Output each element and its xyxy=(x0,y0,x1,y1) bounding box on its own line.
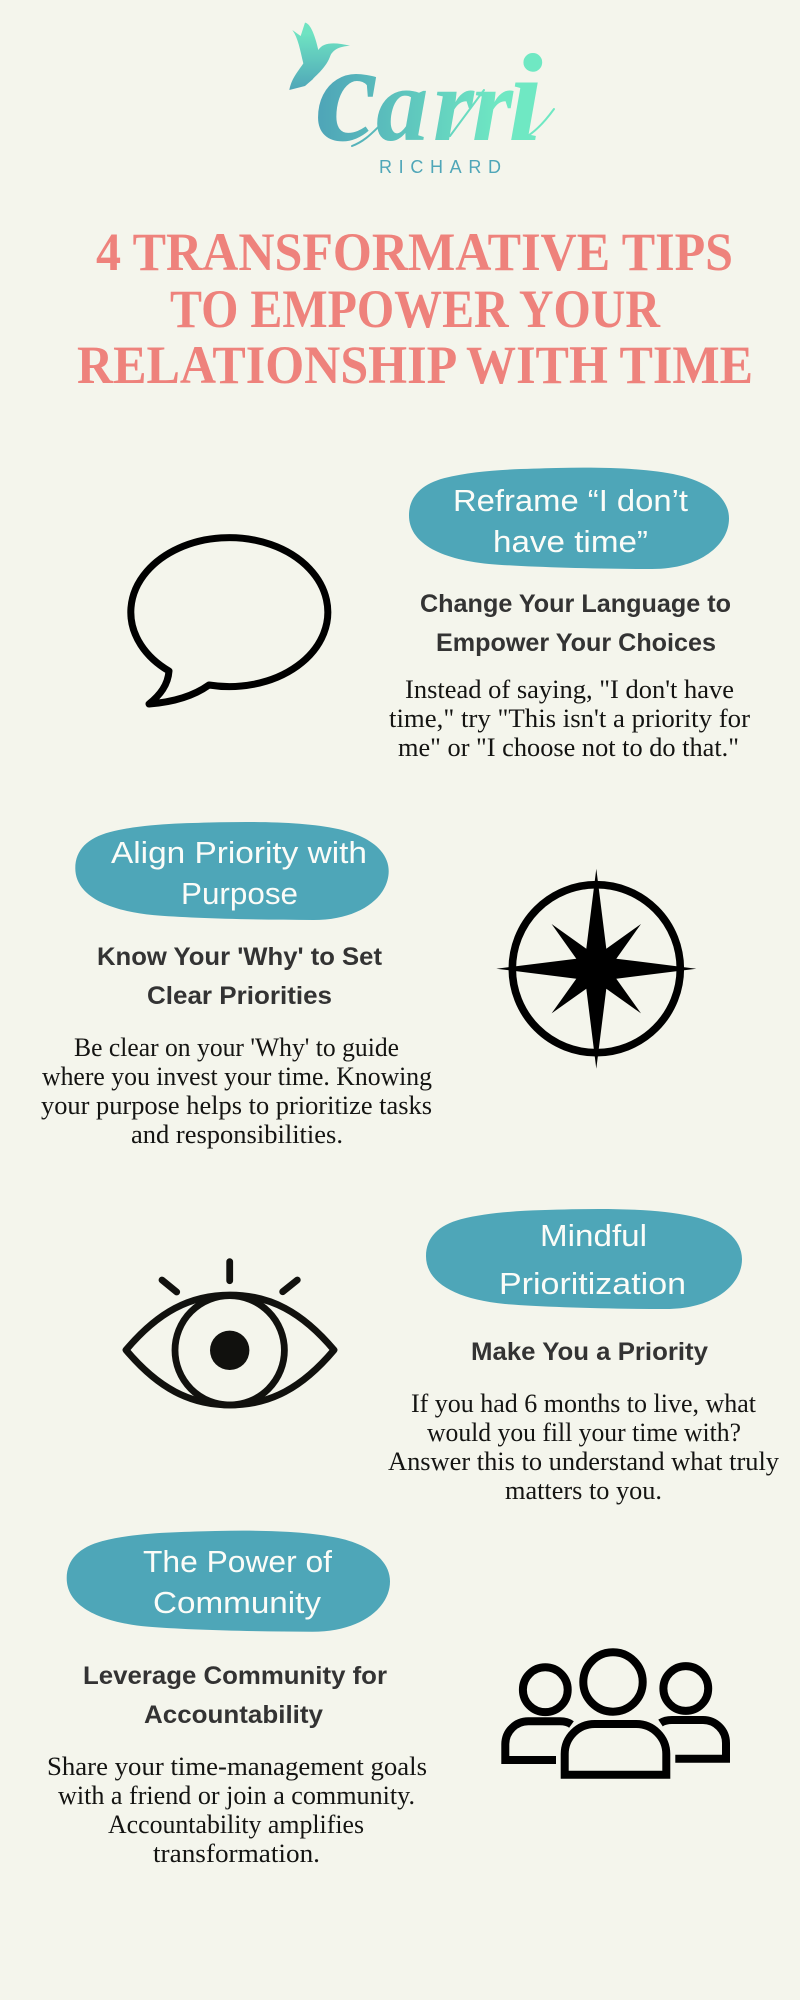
title: TO EMPOWER YOUR xyxy=(170,279,661,339)
body text: align priority: and responsibilities. xyxy=(131,1120,343,1149)
pill heading: power of community: The Power of xyxy=(143,1544,332,1579)
subheading: know your why xyxy=(97,943,383,1010)
panel: mindful prioritization xyxy=(126,1209,779,1505)
panel: align priority with purpose xyxy=(41,822,696,1149)
icon: compass rose xyxy=(496,869,696,1069)
body text: mindful prioritization: If you had 6 months to live, what xyxy=(411,1389,757,1418)
subheading: change your language: Change Your Language to xyxy=(420,590,731,618)
subheading: know your why: Know Your 'Why' to Set xyxy=(97,943,383,971)
pill heading: reframe xyxy=(409,468,729,569)
panel: the power of community xyxy=(47,1531,726,1868)
title: RELATIONSHIP WITH TIME xyxy=(77,335,753,395)
icon: hummingbird xyxy=(289,23,350,90)
pill heading: mindful prioritization: Prioritization xyxy=(499,1266,686,1301)
logo swashes xyxy=(352,90,554,146)
subheading: leverage community: Accountability xyxy=(144,1701,323,1729)
body text: community: Share your time-management goals xyxy=(47,1752,427,1781)
icon: eye xyxy=(126,1262,334,1405)
logo wordmark: i xyxy=(508,30,543,168)
body text: community: with a friend or join a community. xyxy=(58,1781,415,1810)
pill heading: align priority: Align Priority with xyxy=(111,835,367,870)
body text: reframe xyxy=(389,675,750,762)
logo surname: RICHARD xyxy=(379,157,501,177)
subheading: know your why: Clear Priorities xyxy=(147,982,332,1010)
body text: mindful prioritization: matters to you. xyxy=(505,1476,662,1505)
body text: mindful prioritization xyxy=(388,1389,779,1505)
body text: mindful prioritization: would you fill your time with? xyxy=(427,1418,741,1447)
body text: community xyxy=(47,1752,427,1868)
subheading: change your language: Empower Your Choices xyxy=(436,629,716,657)
title xyxy=(77,222,753,395)
pill heading: align priority xyxy=(75,822,389,920)
pill heading: reframe: Reframe “I don’t xyxy=(453,483,688,518)
icon: speech bubble xyxy=(131,538,328,704)
subheading: leverage community xyxy=(83,1662,387,1729)
body text: reframe: Instead of saying, "I don't have xyxy=(405,675,734,704)
pill heading: power of community xyxy=(67,1531,390,1632)
body text: community: Accountability amplifies xyxy=(108,1810,364,1839)
icon: group of three people xyxy=(505,1652,726,1775)
body text: mindful prioritization: Answer this to understand what truly xyxy=(388,1447,779,1476)
pill heading: power of community: Community xyxy=(153,1585,322,1620)
body text: community: transformation. xyxy=(153,1839,320,1868)
body text: align priority: your purpose helps to prioritize tasks xyxy=(41,1091,432,1120)
subheading: leverage community: Leverage Community for xyxy=(83,1662,387,1690)
title: 4 TRANSFORMATIVE TIPS xyxy=(96,222,733,282)
logo wordmark: r xyxy=(433,46,475,163)
pill heading: align priority: Purpose xyxy=(181,876,298,911)
subheading: change your language xyxy=(420,590,731,657)
pill heading: reframe: have time” xyxy=(493,524,648,559)
logo wordmark: a xyxy=(376,46,428,163)
body text: reframe: me" or "I choose not to do that." xyxy=(398,733,739,762)
pill heading: mindful prioritization xyxy=(426,1209,742,1309)
pill heading: mindful prioritization: Mindful xyxy=(540,1218,647,1253)
logo: Carri Richard xyxy=(289,16,554,177)
subheading: make you a priority: Make You a Priority xyxy=(471,1338,708,1366)
logo wordmark: r xyxy=(472,46,514,163)
body text: reframe: time," try "This isn't a priority for xyxy=(389,704,750,733)
body text: align priority: where you invest your time. Knowing xyxy=(42,1062,432,1091)
panel: reframe I don't have time xyxy=(131,468,750,762)
logo wordmark: c xyxy=(316,16,378,171)
body text: align priority xyxy=(41,1033,432,1149)
body text: align priority: Be clear on your 'Why' to guide xyxy=(74,1033,399,1062)
